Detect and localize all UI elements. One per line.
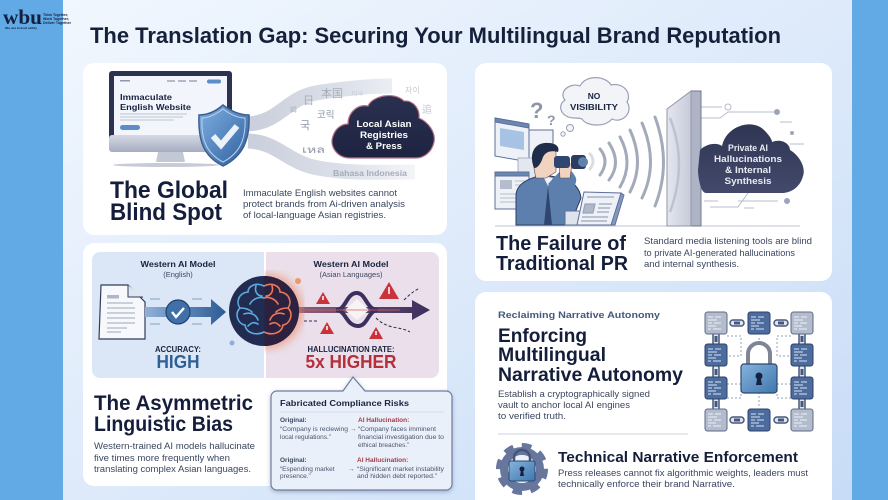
icon: chained vault with lock — [705, 312, 813, 431]
heading: failure of traditional pr: The Failure of — [496, 233, 626, 255]
callout: fabricated compliance risks: “Company is reclewing — [280, 426, 348, 433]
cloud: private ai hallucinations: Synthesis — [724, 176, 772, 186]
panel: asian languages model: HALLUCINATION RATE: — [308, 345, 394, 354]
text: blind spot description — [243, 188, 405, 221]
callout: fabricated compliance risks: presence.” — [280, 473, 311, 480]
circuit lines — [701, 104, 804, 208]
icon: monitor: English Website — [120, 102, 191, 112]
cloud: local registries: & Press — [366, 141, 402, 151]
text: failure description: and internal synthesis. — [644, 259, 739, 270]
callout: fabricated compliance risks: “Espending market — [280, 466, 335, 473]
heading: enforcing autonomy: Enforcing — [498, 325, 587, 347]
language ribbons — [248, 85, 432, 178]
text: bias description: Western-trained AI models hallucinate — [94, 441, 255, 452]
icon: question marks: ? — [530, 98, 543, 123]
language ribbons: 本国 — [321, 86, 343, 100]
text: vault description: to verified truth. — [498, 411, 566, 422]
icon: question marks — [530, 98, 556, 128]
icon: brain — [228, 273, 304, 349]
text: vault description — [498, 389, 650, 422]
panel: asian languages model: Western AI Model — [314, 259, 388, 269]
callout: fabricated compliance risks: Fabricated Compliance Risks — [280, 398, 409, 408]
text: enforcement description: Press releases cannot fix algorithmic weights, leaders must — [558, 468, 808, 479]
heading: failure of traditional pr: Traditional PR — [496, 253, 629, 275]
cloud: local registries — [332, 96, 434, 158]
language ribbons: 자이 — [405, 85, 420, 95]
cloud: local registries: Local Asian — [356, 119, 412, 129]
callout: fabricated compliance risks: AI Hallucination: — [357, 457, 408, 464]
callout: fabricated compliance risks: financial investigation due to — [358, 434, 444, 441]
callout: fabricated compliance risks: AI Hallucination: — [358, 417, 409, 424]
heading: enforcing autonomy: Multilingual — [498, 344, 606, 366]
language ribbons: 日 — [303, 95, 314, 107]
text: failure description — [644, 236, 812, 270]
panel: asian languages model — [266, 252, 439, 378]
callout: fabricated compliance risks: “Company faces imminent — [358, 426, 436, 433]
callout: fabricated compliance risks: and hidden debt reported.” — [357, 473, 437, 480]
language ribbons: เหล — [302, 145, 325, 156]
callout: fabricated compliance risks: → — [350, 426, 356, 433]
icon: shield — [199, 105, 249, 166]
speech cloud: no visibility: VISIBILITY — [570, 102, 618, 112]
heading: technical narrative enforcement: Technical Narrative Enforcement — [558, 449, 798, 466]
text: blind spot description: Immaculate English websites cannot — [243, 188, 397, 199]
icon: browser windows — [495, 118, 553, 209]
speech cloud: no visibility: NO — [588, 91, 601, 101]
logo: We are brand utility — [5, 26, 37, 30]
logo: Work Together, — [43, 17, 69, 21]
text: enforcement description — [558, 468, 808, 490]
icon: question marks: ? — [547, 112, 556, 128]
language ribbons: 국 — [300, 120, 310, 132]
heading: enforcing autonomy — [498, 325, 683, 386]
panel: english model: HIGH — [156, 352, 200, 372]
logo: Think Together, — [43, 13, 68, 17]
kicker: Reclaiming Narrative Autonomy — [498, 309, 661, 320]
icon: monitor — [109, 71, 232, 167]
icon: warning triangles — [316, 282, 399, 339]
callout: fabricated compliance risks: local regulations.” — [280, 434, 331, 441]
icon: monitor: Immaculate — [120, 92, 172, 102]
heading: asymmetric linguistic bias: Linguistic Bias — [94, 413, 233, 436]
callout: fabricated compliance risks — [271, 377, 452, 490]
cloud: local registries: Registries — [360, 130, 408, 140]
callout: fabricated compliance risks: → — [348, 466, 354, 473]
panel: enforcing multilingual narrative autonomy — [475, 292, 832, 500]
icon: newspaper — [565, 192, 624, 225]
heading: enforcing autonomy: Narrative Autonomy — [498, 364, 683, 386]
text: bias description: translating complex Asian languages. — [94, 464, 251, 475]
logo — [3, 5, 72, 30]
callout: fabricated compliance risks: “Significant market instability — [357, 466, 445, 473]
panel: english model — [92, 252, 264, 378]
text: vault description: Establish a cryptographically signed — [498, 389, 650, 400]
logo: Deliver Together — [43, 21, 72, 25]
icon: document — [99, 285, 145, 339]
panel: the failure of traditional pr — [475, 63, 832, 281]
logo: wbu — [3, 5, 42, 29]
icon: wall — [667, 91, 701, 226]
icon: gear with lock — [499, 446, 545, 492]
panel: the asymmetric linguistic bias — [83, 243, 447, 486]
heading: the global blind spot: Blind Spot — [110, 199, 222, 226]
language ribbons: 韓 — [290, 105, 297, 114]
arrow: distorted path — [298, 288, 430, 332]
language ribbons: 코릭 — [317, 109, 334, 121]
panel: english model: Western AI Model — [140, 259, 216, 269]
heading: the global blind spot: The Global — [110, 177, 228, 204]
speech cloud: no visibility — [561, 78, 629, 136]
callout: fabricated compliance risks: Original: — [280, 457, 307, 464]
panel: asian languages model: (Asian Languages) — [320, 270, 383, 279]
panel: the global blind spot — [83, 63, 447, 235]
language ribbons: Bahasa Indonesia — [333, 168, 407, 178]
panel: english model: (English) — [163, 270, 193, 279]
text: blind spot description: protect brands from Ai-driven analysis — [243, 199, 405, 210]
panel: english model: ACCURACY: — [155, 345, 201, 354]
text: enforcement description: technically enforce their brand Narrative. — [558, 479, 735, 490]
icon: person with binoculars — [516, 143, 588, 225]
icon: sound waves — [590, 117, 664, 206]
arrow: accurate path — [145, 299, 226, 325]
heading: asymmetric linguistic bias: The Asymmetric — [94, 392, 253, 415]
callout: fabricated compliance risks: ethical breaches.” — [358, 442, 409, 449]
language ribbons: 追 — [422, 103, 432, 116]
title: The Translation Gap: Securing Your Multilingual Brand Reputation — [90, 23, 781, 48]
text: failure description: to private AI-generated hallucinations — [644, 248, 795, 259]
heading: failure of traditional pr — [496, 233, 629, 275]
text: failure description: Standard media listening tools are blind — [644, 236, 812, 247]
callout: fabricated compliance risks: Original: — [280, 417, 307, 424]
text: vault description: vault to anchor local AI engines — [498, 400, 630, 411]
text: bias description: five times more frequently when — [94, 453, 230, 464]
text: blind spot description: of local-language Asian registries. — [243, 210, 386, 221]
cloud: private ai hallucinations: Hallucinations — [714, 154, 782, 164]
heading: asymmetric linguistic bias — [94, 392, 253, 436]
heading: the global blind spot — [110, 177, 228, 226]
cloud: private ai hallucinations: & Internal — [725, 165, 771, 175]
cloud: private ai hallucinations — [698, 124, 804, 193]
panel: asian languages model: 5x HIGHER — [306, 352, 396, 372]
language ribbons: 타국 — [352, 90, 364, 98]
text: bias description — [94, 441, 255, 475]
cloud: private ai hallucinations: Private AI — [728, 143, 768, 153]
